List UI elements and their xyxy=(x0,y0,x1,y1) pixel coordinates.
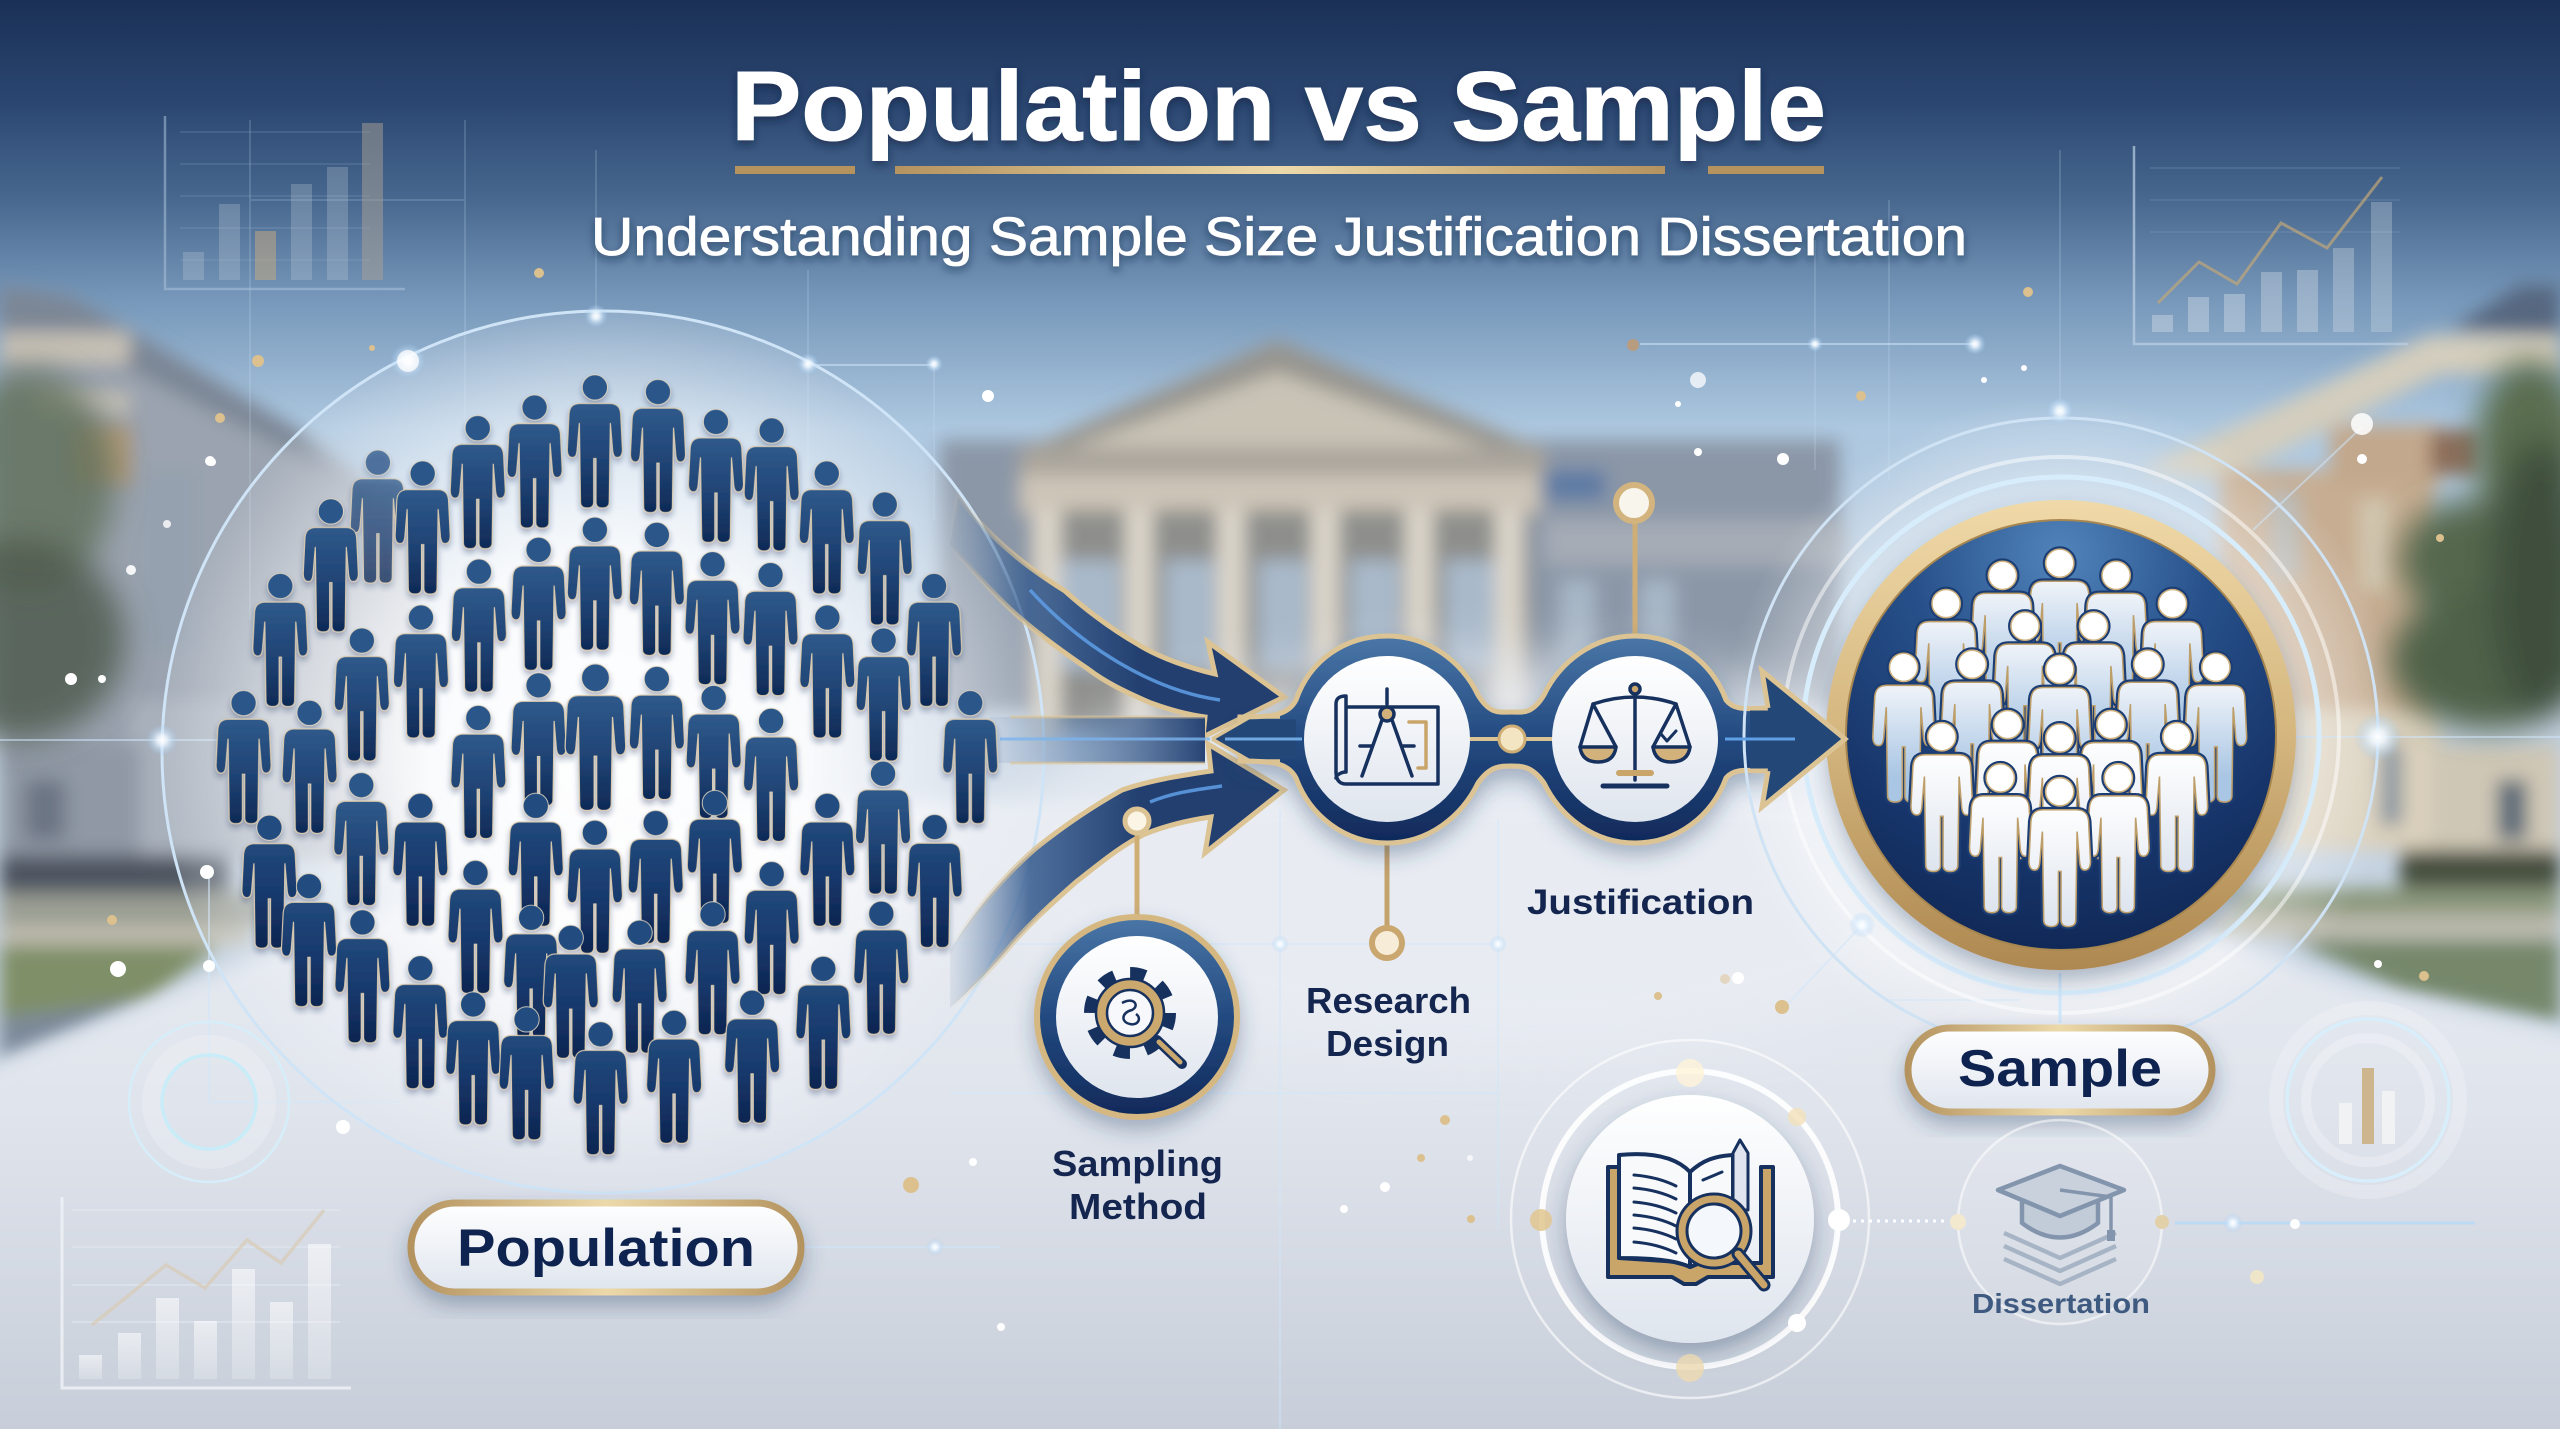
background: central portico xyxy=(940,340,1845,740)
node: book and magnifier xyxy=(1511,1040,1869,1398)
pill label: population xyxy=(411,1203,801,1292)
pill label: sample: Sample xyxy=(1958,1040,2162,1098)
label: justification: Justification xyxy=(1527,883,1754,922)
sample crowd of white person icons xyxy=(1873,548,2247,927)
flow arrow: middle stream xyxy=(990,717,1210,763)
background: blurred campus buildings xyxy=(0,285,2560,1060)
connector: medallion to sample pill xyxy=(2058,973,2062,1023)
flow arrow: bottom stream xyxy=(950,744,1284,1008)
link to gauge area xyxy=(2175,1222,2475,1224)
title: Population vs Sample xyxy=(731,51,1826,161)
icon: gear with magnifier xyxy=(1091,974,1182,1064)
pill label: population: Population xyxy=(457,1219,755,1278)
node plate: research design xyxy=(1304,656,1470,822)
sample medallion xyxy=(1826,500,2296,970)
pill label: sample xyxy=(1908,1028,2212,1112)
flow arrow: top stream xyxy=(950,497,1284,737)
decorative particles: gold xyxy=(107,268,2444,1284)
faded chart: top right xyxy=(2134,146,2408,344)
label: research design: Design xyxy=(1326,1023,1449,1064)
arrow into sample xyxy=(1725,671,1845,807)
background: glow behind sample xyxy=(1721,395,2401,1075)
icon: blueprint and compass xyxy=(1336,689,1438,784)
dissertation icon and label xyxy=(1950,1120,2169,1324)
dissertation icon and label: Dissertation xyxy=(1972,1288,2150,1319)
icon: graduation cap on papers xyxy=(1998,1166,2124,1284)
process pod: research design and justification xyxy=(1212,636,1770,843)
faded chart: bottom left xyxy=(62,1197,351,1388)
decorative particles: white xyxy=(65,350,2382,1331)
background: glow behind flow xyxy=(980,660,2020,1060)
node: sampling method xyxy=(1037,917,1237,1117)
population crowd of person icons xyxy=(216,375,998,1155)
background: blurred trees xyxy=(0,360,2560,740)
background: right building xyxy=(2140,285,2560,1022)
node plate: justification xyxy=(1552,656,1718,822)
flow connector band entering pod xyxy=(1212,717,1302,761)
subtitle: Understanding Sample Size Justification Dissertation xyxy=(591,207,1967,267)
title underline xyxy=(735,166,1824,174)
faded person xyxy=(350,450,405,583)
connector: justification xyxy=(1616,485,1652,640)
ring beads xyxy=(1530,1059,1850,1382)
sample medallion rings xyxy=(1744,418,2378,1052)
background: left building xyxy=(0,285,420,1060)
faded chart: top left xyxy=(165,116,405,289)
bead between nodes xyxy=(1465,726,1560,752)
icon: open book xyxy=(1608,1140,1773,1285)
connector: sampling method xyxy=(1125,809,1149,916)
label: sampling method: Sampling xyxy=(1052,1143,1223,1184)
population circle xyxy=(162,311,1044,1193)
dotted link to dissertation xyxy=(1853,1220,1945,1222)
large centre person xyxy=(565,664,626,810)
background: pale plaza ground xyxy=(0,800,2560,1429)
sparkle stars xyxy=(146,304,2402,1256)
icon: balance scale xyxy=(1580,684,1690,786)
connector: research design xyxy=(1372,840,1402,958)
faded gauge: bottom right xyxy=(2276,1008,2460,1192)
label: sampling method: Method xyxy=(1069,1186,1207,1227)
label: research design: Research xyxy=(1306,980,1471,1021)
faded target rings: bottom left xyxy=(129,1022,289,1182)
